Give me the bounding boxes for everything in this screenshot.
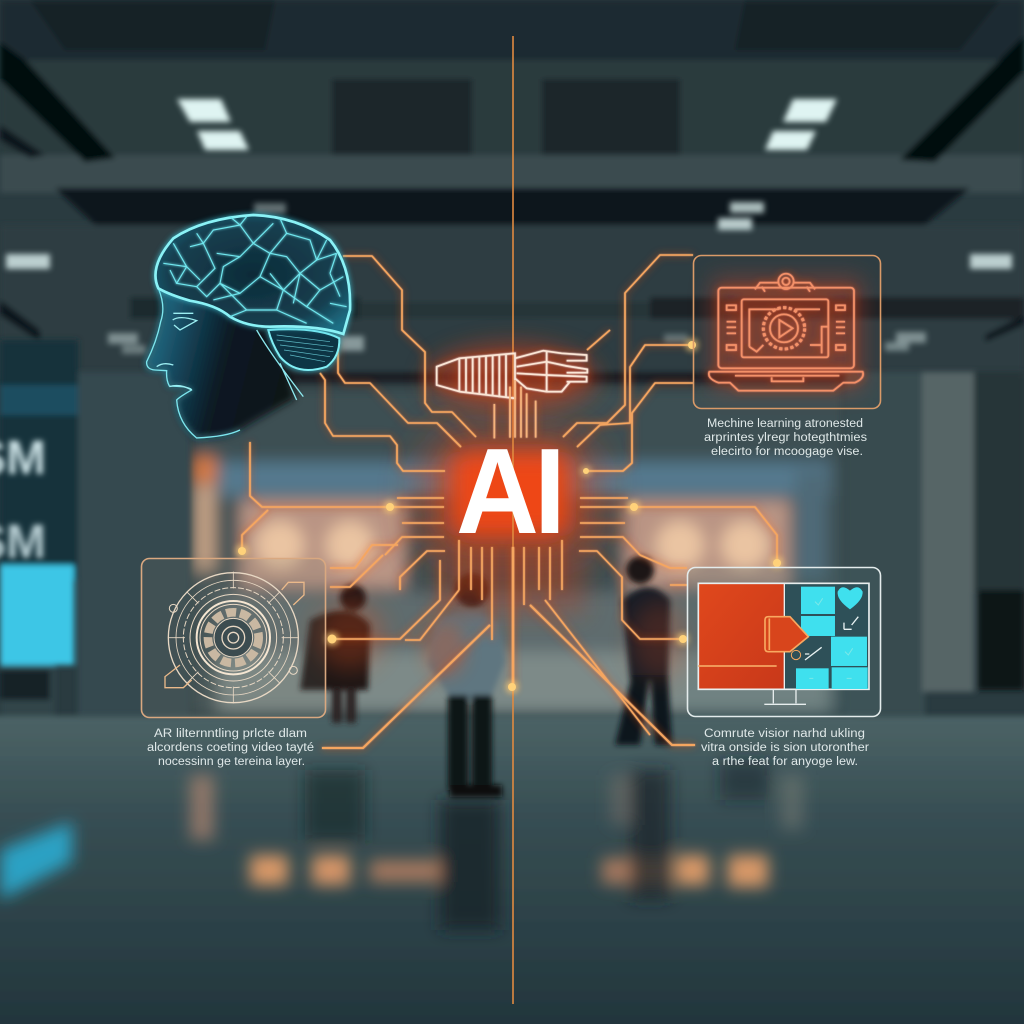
hand and fingers [515, 351, 587, 392]
AI pins [385, 498, 640, 690]
arm cone [437, 353, 515, 398]
orange rule [698, 663, 777, 668]
cerebellum folds [277, 335, 333, 362]
caption: computer vision: a rthe feat for anyoge lew. [712, 756, 858, 768]
panel: brain and head [147, 215, 350, 438]
panel: computer vision [688, 568, 880, 716]
panel frame [142, 558, 326, 718]
panel: AR turbine [142, 558, 326, 718]
caption: computer vision: vitra onside is sion utoronther [701, 742, 869, 754]
lower left traces [322, 545, 490, 748]
screen dark half [698, 583, 869, 689]
floor reflections [0, 760, 804, 930]
cerebellum [268, 329, 339, 370]
people silhouettes [300, 556, 672, 797]
node dots [238, 341, 781, 691]
glow halos behind graphics [315, 278, 862, 680]
ceiling and architecture [0, 0, 1024, 462]
person left [300, 585, 370, 723]
panel frame [694, 256, 880, 408]
head silhouette [147, 288, 295, 438]
ceiling lights [6, 99, 1012, 354]
caption: machine learning: arprintes ylregr hotegthtmies [704, 432, 867, 444]
caption: machine learning [704, 418, 867, 458]
tile ticks [809, 598, 853, 678]
AI heading: AI [456, 424, 566, 560]
icon: concentric turbine [165, 572, 304, 703]
circuit lines [242, 255, 777, 748]
caption: computer vision [701, 728, 869, 768]
pointer arrow [765, 617, 808, 652]
lower right traces [530, 555, 695, 745]
eye, nose, lips [157, 313, 197, 390]
reflective floor [0, 716, 1024, 1024]
caption: AR turbine [147, 728, 314, 768]
panel frame [688, 568, 880, 716]
icon: monitor with tiles [698, 583, 869, 704]
corner tabs [165, 582, 304, 688]
caption: machine learning: Mechine learning atronested [707, 418, 863, 430]
icon: robotic arm [437, 351, 587, 438]
concourse windows and warm shop glow [190, 385, 850, 715]
wires [494, 380, 536, 438]
caption: AR turbine: alcordens coeting video tayté [147, 742, 314, 754]
columns and left screen [0, 340, 1024, 765]
left wall sign letters [0, 432, 46, 569]
face outline [147, 288, 240, 438]
caption: machine learning: elecirto for mcoogage vise. [711, 446, 863, 458]
cyan tiles [796, 587, 868, 689]
person right [615, 556, 672, 745]
caption: computer vision: Comrute visior narhd ukling [704, 728, 865, 740]
top right traces [563, 255, 777, 563]
panel: machine learning laptop [694, 256, 880, 408]
caption: AR turbine: AR lilternntling prlcte dlam [154, 728, 307, 740]
screen border [698, 583, 869, 689]
brain outline [155, 215, 350, 334]
central vertical axis line [512, 36, 514, 1004]
caption: AR turbine: nocessinn ge tereina layer. [158, 756, 305, 768]
top left traces [242, 256, 476, 551]
monitor stand [764, 689, 806, 704]
red half [698, 583, 784, 689]
person centre [428, 573, 505, 797]
neck cords [257, 330, 303, 400]
icon: laptop with play gear [709, 274, 863, 391]
link glyphs [805, 617, 858, 660]
brain folds [163, 217, 347, 323]
